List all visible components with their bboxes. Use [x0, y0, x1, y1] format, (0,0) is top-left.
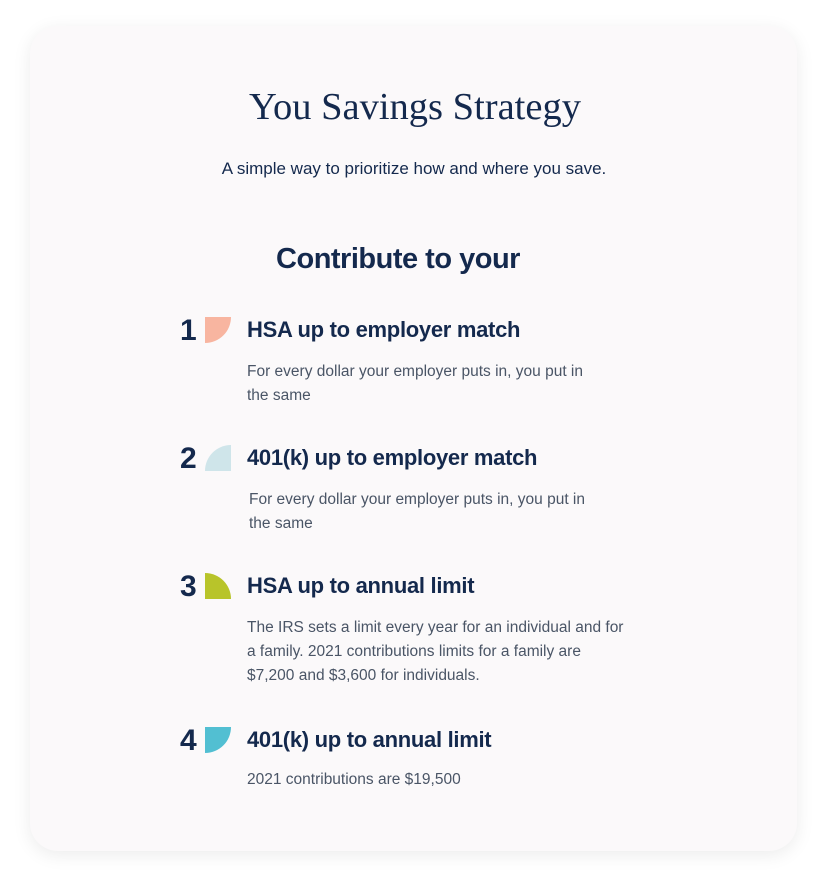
- number 2: 2: [180, 442, 197, 475]
- description 1: [247, 363, 583, 404]
- item title 2: 401(k) up to employer match: [247, 445, 537, 470]
- heading: Contribute to your: [276, 243, 520, 275]
- description 3: [247, 619, 624, 684]
- description 3: a family. 2021 contributions limits for a family are: [247, 643, 581, 660]
- description 3: $7,200 and $3,600 for individuals.: [247, 667, 480, 684]
- icon 1: [205, 317, 231, 343]
- icon 4: [205, 727, 231, 753]
- item title 4: 401(k) up to annual limit: [247, 727, 491, 752]
- item 4: [180, 724, 492, 788]
- subtitle: A simple way to prioritize how and where you save.: [222, 159, 606, 178]
- item 2: [180, 442, 585, 532]
- description 2: [249, 491, 585, 532]
- description 1: the same: [247, 387, 311, 404]
- number 1: 1: [180, 314, 197, 347]
- description 2: the same: [249, 515, 313, 532]
- item title 1: HSA up to employer match: [247, 317, 520, 342]
- icon 2: [205, 445, 231, 471]
- number 3: 3: [180, 570, 197, 603]
- icon 3: [205, 573, 231, 599]
- description 2: For every dollar your employer puts in, you put in: [249, 491, 585, 508]
- number 4: 4: [180, 724, 197, 757]
- description 4: 2021 contributions are $19,500: [247, 771, 461, 788]
- title: You Savings Strategy: [249, 86, 581, 128]
- item 3: [180, 570, 624, 684]
- description 1: For every dollar your employer puts in, you put in: [247, 363, 583, 380]
- item title 3: HSA up to annual limit: [247, 573, 474, 598]
- item 1: [180, 314, 583, 404]
- description 3: The IRS sets a limit every year for an individual and for: [247, 619, 623, 636]
